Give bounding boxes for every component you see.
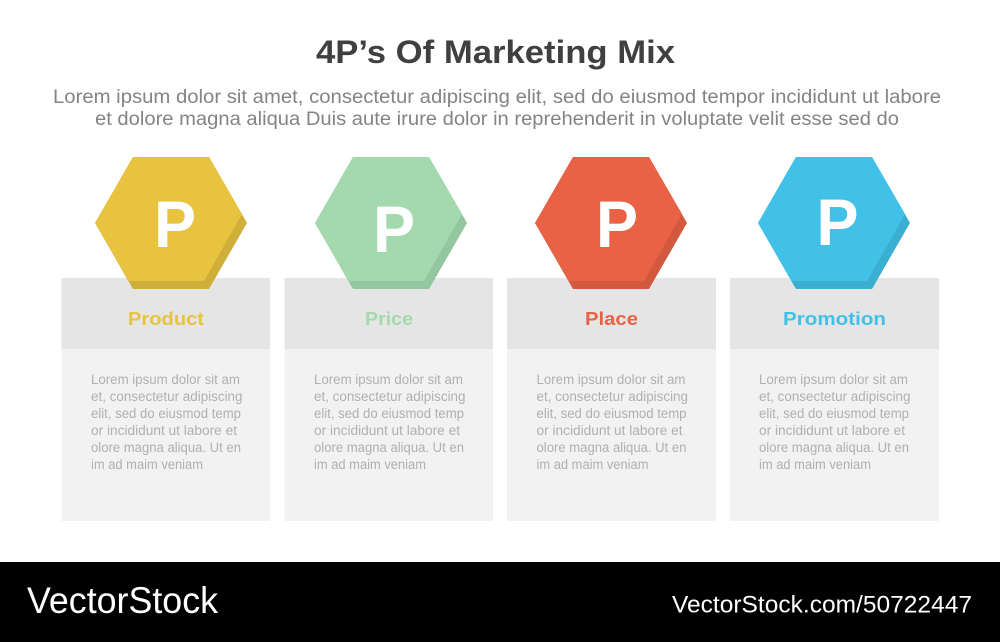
promotion description: im ad maim veniam xyxy=(759,457,871,472)
promotion description: et, consectetur adipiscing xyxy=(759,389,910,404)
place description: Lorem ipsum dolor sit am xyxy=(536,372,686,387)
price description: Lorem ipsum dolor sit am xyxy=(314,372,463,387)
footer band xyxy=(0,562,1000,642)
promotion header band xyxy=(730,278,939,349)
icon: place hexagon xyxy=(535,157,687,289)
price description: or incididunt ut labore et xyxy=(314,423,460,438)
product description: im ad maim veniam xyxy=(91,457,203,472)
place label: Place xyxy=(585,308,638,329)
price description: im ad maim veniam xyxy=(314,457,426,472)
place header band xyxy=(507,278,716,349)
panel: place xyxy=(507,157,716,521)
place description: or incididunt ut labore et xyxy=(536,423,683,438)
panel: price xyxy=(284,157,493,521)
price description: elit, sed do eiusmod temp xyxy=(314,406,464,421)
title: 4P’s Of Marketing Mix xyxy=(316,34,675,70)
product description: et, consectetur adipiscing xyxy=(91,389,242,404)
product description: olore magna aliqua. Ut en xyxy=(91,440,241,455)
subtitle text xyxy=(53,87,941,130)
product description: or incididunt ut labore et xyxy=(91,423,237,438)
icon: price hexagon: P xyxy=(373,192,415,266)
panel: product xyxy=(62,157,270,521)
place description: olore magna aliqua. Ut en xyxy=(536,440,686,455)
subtitle text: Lorem ipsum dolor sit amet, consectetur adipiscing elit, sed do eiusmod tempor incididunt ut labore xyxy=(53,87,941,108)
price body box xyxy=(284,349,493,521)
promotion description: or incididunt ut labore et xyxy=(759,423,905,438)
icon: promotion hexagon xyxy=(758,157,910,289)
icon: product hexagon xyxy=(95,157,247,289)
panel: promotion xyxy=(730,157,939,521)
product description xyxy=(91,372,242,472)
product description: elit, sed do eiusmod temp xyxy=(91,406,241,421)
icon: price hexagon xyxy=(315,157,467,289)
place description: elit, sed do eiusmod temp xyxy=(536,406,686,421)
promotion description: elit, sed do eiusmod temp xyxy=(759,406,909,421)
price description: olore magna aliqua. Ut en xyxy=(314,440,464,455)
promotion description: Lorem ipsum dolor sit am xyxy=(759,372,908,387)
product description: Lorem ipsum dolor sit am xyxy=(91,372,240,387)
icon: promotion hexagon: P xyxy=(816,185,858,259)
icon: place hexagon: P xyxy=(596,187,638,261)
promotion body box xyxy=(730,349,939,521)
price description xyxy=(314,372,466,472)
footer brand name: VectorStock xyxy=(27,580,218,621)
product body box xyxy=(62,349,270,521)
price label: Price xyxy=(365,308,413,329)
price description: et, consectetur adipiscing xyxy=(314,389,466,404)
place description: im ad maim veniam xyxy=(536,457,648,472)
footer image url: VectorStock.com/50722447 xyxy=(672,592,972,618)
promotion label: Promotion xyxy=(783,308,886,329)
product label: Product xyxy=(128,308,204,329)
promotion description: olore magna aliqua. Ut en xyxy=(759,440,909,455)
place body box xyxy=(507,349,716,521)
product header band xyxy=(62,278,270,349)
place description xyxy=(536,372,688,472)
place description: et, consectetur adipiscing xyxy=(536,389,688,404)
icon: product hexagon: P xyxy=(154,187,196,261)
promotion description xyxy=(759,372,910,472)
subtitle text: et dolore magna aliqua Duis aute irure dolor in reprehenderit in voluptate velit esse sed do xyxy=(95,109,899,130)
price header band xyxy=(284,278,493,349)
